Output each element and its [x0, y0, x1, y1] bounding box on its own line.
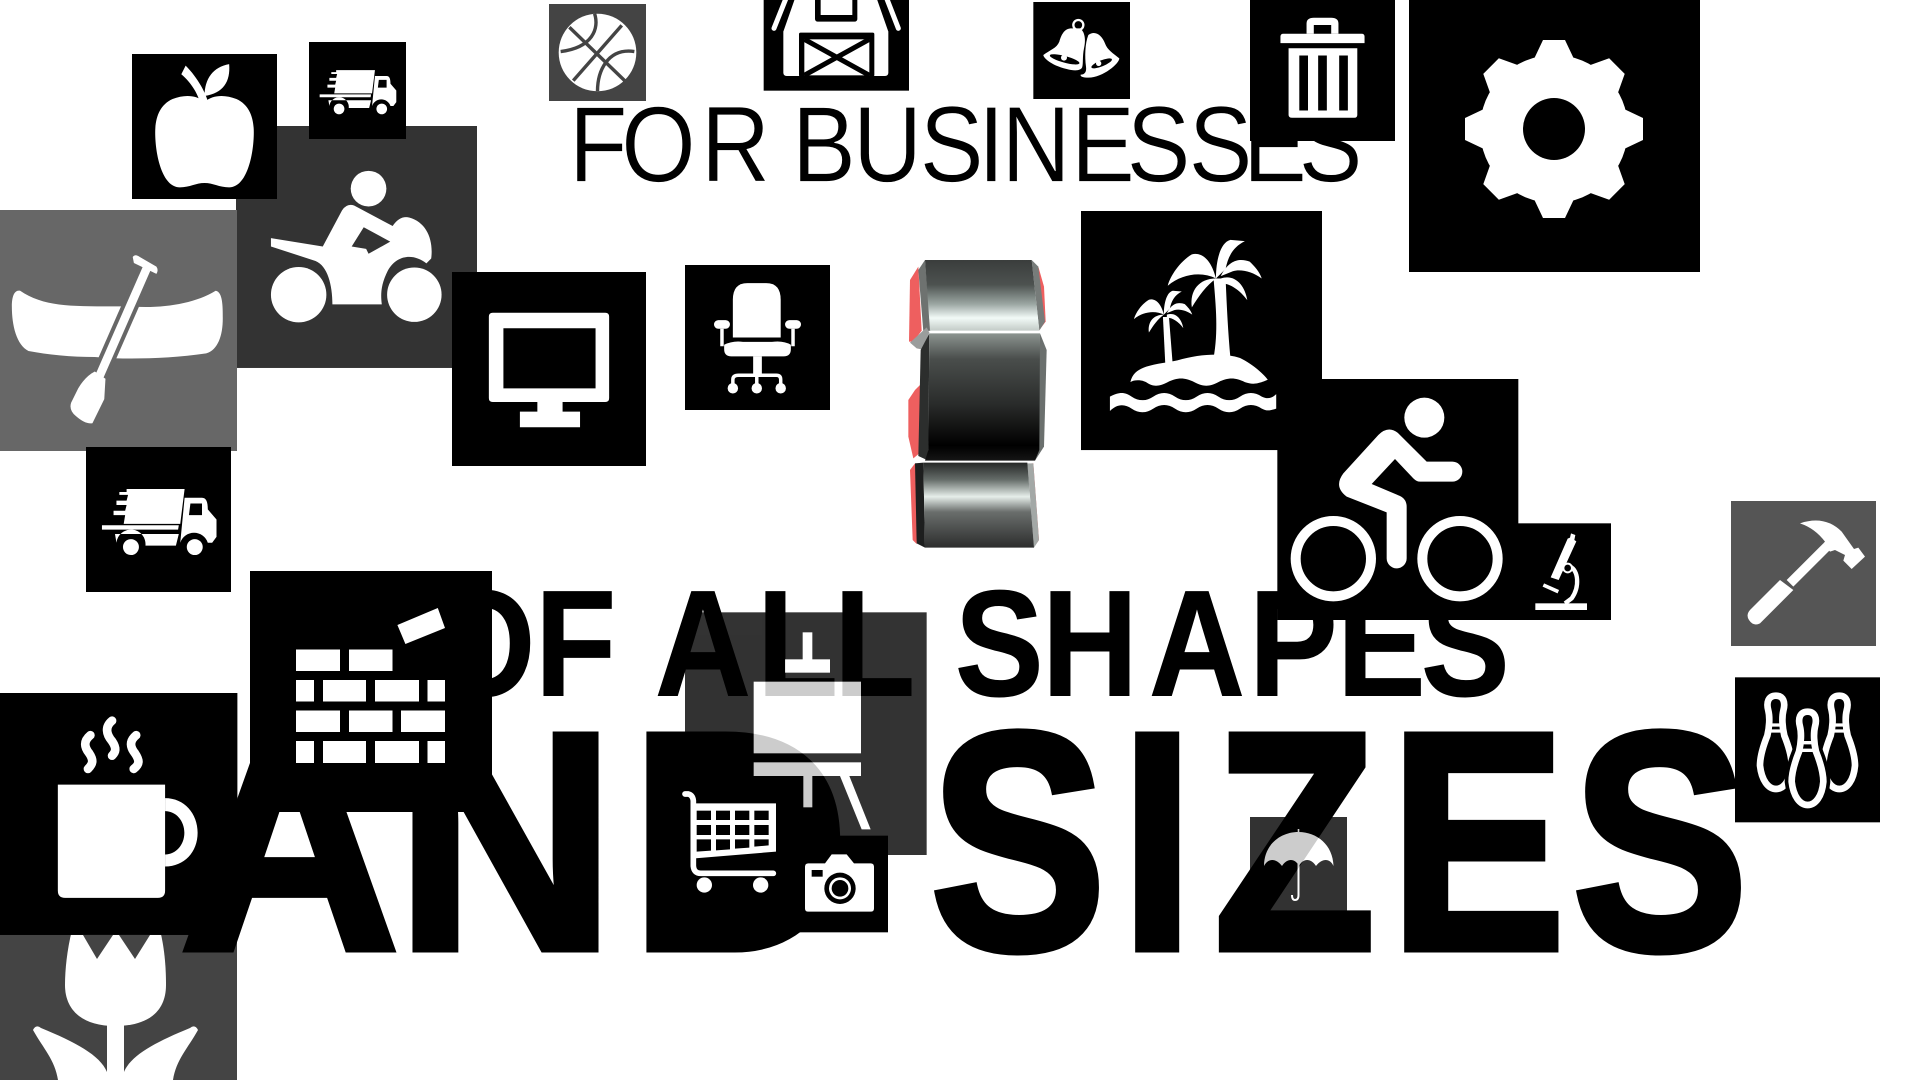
heading: and: AND: [180, 668, 850, 1016]
middle segment: [918, 333, 1047, 461]
tile background: [309, 42, 406, 139]
icon: bells: [1043, 20, 1119, 78]
panel: brick wall tile: [250, 571, 492, 812]
tile background: [0, 693, 237, 935]
icon: microscope: [1535, 533, 1587, 610]
tile background: [86, 447, 231, 592]
top segment: [910, 260, 1045, 349]
icon: office chair: [714, 283, 801, 393]
tile background: [549, 4, 646, 101]
icon: basketball: [559, 14, 636, 91]
panel: hammer and bowling tiles: [1731, 501, 1880, 822]
panel: apple tile: [132, 54, 277, 199]
tile background: microscope: [1514, 523, 1611, 620]
panel: canoe tile: [0, 210, 237, 451]
panel: bells tile: [1033, 2, 1130, 99]
icon: barn: [774, 0, 898, 77]
panel: shopping cart and camera: [685, 794, 888, 932]
icon: umbrella: [1264, 829, 1334, 900]
panel: easel tile: [685, 612, 927, 855]
heading: sizes: SIZES: [930, 669, 1748, 1016]
panel: basketball tile: [549, 4, 646, 101]
tile background: [1409, 0, 1700, 272]
panel: small delivery truck tile: [309, 42, 406, 139]
heading: of all shapes: OF ALL SHAPES: [432, 560, 1510, 728]
panel: coffee mug tile: [0, 693, 237, 935]
bottom segment: [915, 463, 1039, 548]
panel: tulip tile: [0, 900, 237, 1080]
icon: monitor: [489, 313, 609, 427]
icon: bowling pins: [1760, 696, 1855, 805]
icon: easel: [754, 632, 871, 829]
icon: palm trees on island: [1110, 240, 1276, 412]
panel: monitor tile: [452, 272, 646, 466]
tile background: [1033, 2, 1130, 99]
tile background: [1250, 817, 1347, 914]
panel: office chair tile: [685, 265, 830, 410]
tile background: camera: [791, 836, 888, 932]
tile background: [236, 126, 477, 368]
icon: shopping cart: [685, 794, 776, 893]
panel: trash tile: [1250, 0, 1395, 141]
panel: shopping cart tile background: [668, 765, 800, 925]
icon: delivery truck: [320, 70, 396, 116]
tile background: hammer: [1731, 501, 1876, 646]
icon: gear: [1465, 40, 1643, 218]
red side faces: [908, 267, 1046, 544]
icon: trash can: [1280, 18, 1365, 118]
panel: palm island tile: [1081, 211, 1322, 450]
icon: tulip: [33, 930, 198, 1080]
icon: brick wall: [296, 608, 445, 763]
tile background: [452, 272, 646, 466]
tile background: cyclist: [1277, 379, 1518, 620]
tile background: [132, 54, 277, 199]
icon: apple: [155, 64, 254, 187]
tile background: [0, 900, 237, 1080]
tile background: [0, 210, 237, 451]
panel: cyclist and microscope tiles: [1277, 379, 1611, 620]
tile background: [685, 612, 927, 855]
panel: large delivery truck tile: [86, 447, 231, 592]
tile background: [1250, 0, 1395, 141]
tile background: [250, 571, 492, 812]
icon: motorcycle: [271, 171, 442, 322]
icon: hammer: [1748, 521, 1865, 624]
icon: canoe and paddle: [12, 255, 223, 423]
tile background: [1081, 211, 1322, 450]
panel: umbrella tile: [1250, 817, 1347, 914]
icon: delivery truck: [102, 489, 216, 558]
panel: motorcycle tile: [236, 126, 477, 368]
panel: gear tile: [1409, 0, 1700, 272]
panel: barn tile: [764, 0, 909, 91]
panel: 3D metallic cylinder: [908, 260, 1047, 548]
icon: coffee mug with steam: [58, 721, 198, 898]
tile background: [764, 0, 909, 91]
tile background: bowling: [1735, 677, 1880, 822]
icon: cyclist: [1296, 398, 1498, 596]
tile background: [685, 265, 830, 410]
heading: for businesses: FOR BUSINESSES: [569, 84, 1363, 205]
icon: camera: [805, 854, 874, 912]
